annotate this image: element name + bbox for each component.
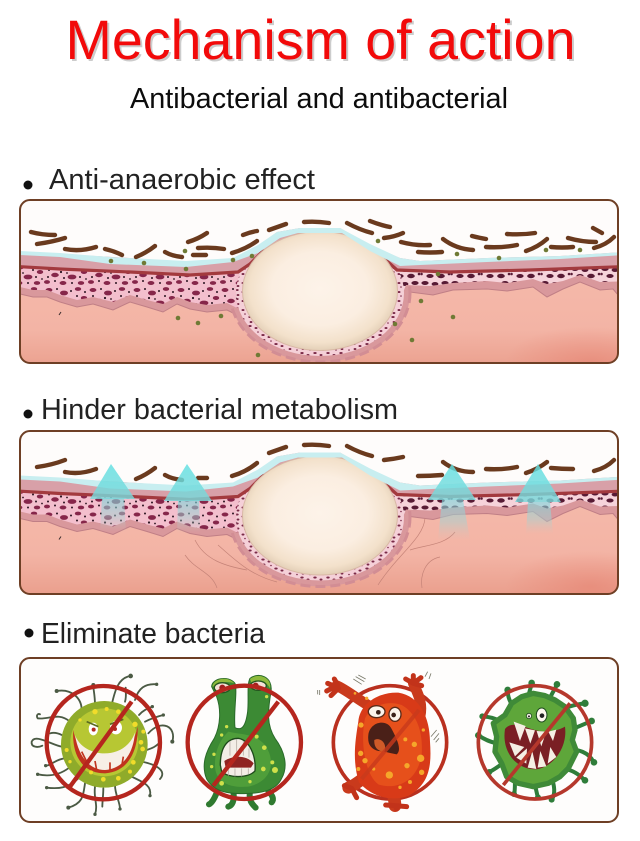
- heading: eliminate bacteria: Eliminate bacteria: [41, 618, 266, 650]
- panel: anti-anaerobic effect skin diagram: [19, 199, 619, 364]
- heading: hinder bacterial metabolism: Hinder bacterial metabolism: [41, 394, 398, 426]
- heading: anti-anaerobic effect: Anti-anaerobic effect: [49, 164, 315, 196]
- icon: crossed-out green spiky germ: [475, 680, 597, 803]
- title: Mechanism of action: [68, 10, 578, 73]
- icon: crossed-out green alien germ: [188, 675, 301, 808]
- skin cross-section with cyst: [21, 228, 617, 362]
- panel: eliminate bacteria: [20, 658, 618, 822]
- arrow: left-most cyan arrow: [90, 464, 135, 532]
- subtitle: Antibacterial and antibacterial: [130, 83, 508, 115]
- arrow: fourth cyan arrow: [515, 464, 561, 534]
- skin cross-section with cyst: [21, 452, 617, 593]
- icon: crossed-out yellow-green germ: [32, 674, 174, 816]
- bacteria rods: [37, 445, 614, 480]
- arrow: second cyan arrow: [164, 464, 212, 533]
- arrow: third cyan arrow: [428, 464, 476, 540]
- panel: hinder bacterial metabolism skin diagram: [19, 430, 619, 595]
- icon: crossed-out orange germ: [318, 672, 447, 809]
- bacteria spores: [109, 239, 582, 357]
- title: Mechanism of action: [66, 8, 576, 71]
- fine cracks in tissue: [185, 518, 455, 588]
- bacteria rods: [31, 221, 614, 257]
